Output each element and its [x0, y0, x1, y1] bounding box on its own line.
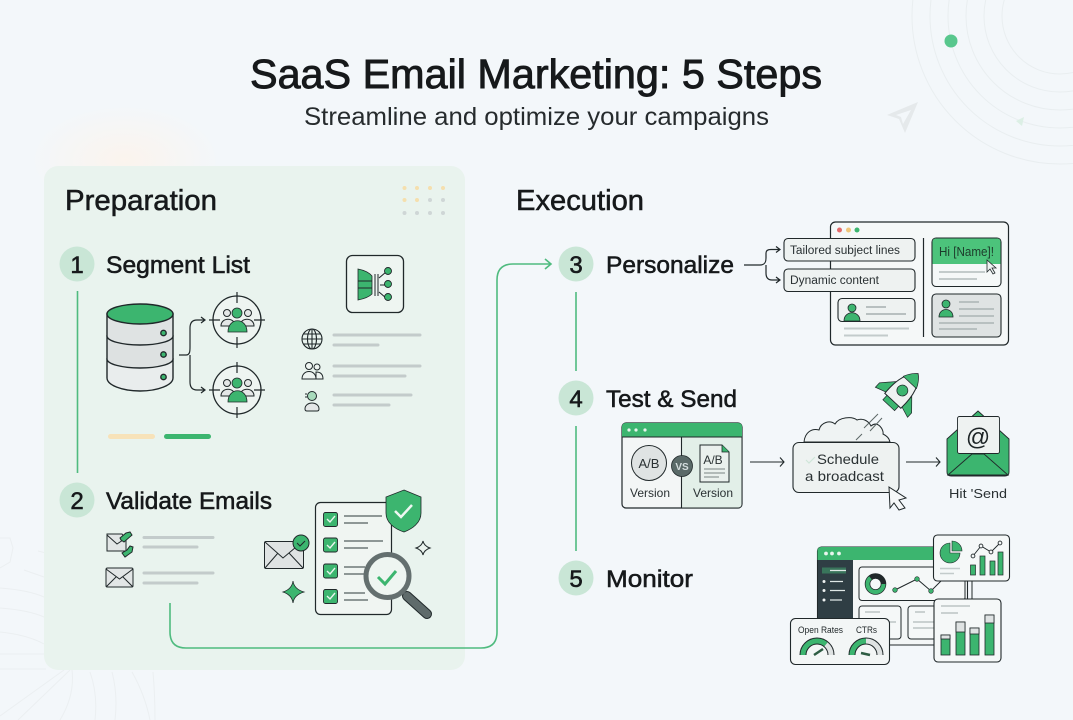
arrow: personalize branches — [744, 246, 780, 283]
schedule box: a broadcast — [805, 468, 884, 484]
card: profile right — [932, 294, 1001, 337]
icon: rocket — [873, 359, 934, 420]
step 4 heading — [558, 380, 737, 416]
step 2 heading — [60, 482, 272, 518]
icon: person with gear — [305, 392, 319, 411]
gauge card — [790, 618, 890, 664]
timeline connector: step 4 to 5 — [575, 426, 577, 551]
decoration: paper plane — [887, 102, 918, 133]
pill: tailored subject lines: Tailored subject lines — [790, 245, 900, 257]
arrow: test to schedule — [750, 458, 784, 466]
decoration: green dot — [944, 34, 958, 48]
arrow: database to segments — [179, 317, 205, 393]
A/B test window — [622, 423, 742, 508]
card: profile left — [838, 298, 915, 322]
step 3 heading: 3 — [569, 252, 583, 279]
A/B test window: Version — [693, 486, 733, 500]
step 2 heading: Validate Emails — [106, 488, 272, 515]
step 3 heading: Personalize — [606, 252, 734, 279]
step 1 heading: Segment List — [106, 252, 250, 279]
step 1 heading — [60, 246, 250, 282]
arrow: preparation to execution — [170, 259, 551, 648]
pill: dynamic content — [784, 269, 915, 292]
icon: cursor — [889, 487, 906, 510]
icon: rocket trail — [856, 414, 882, 440]
placeholder text lines: segments — [334, 335, 420, 405]
decoration: dot grid — [402, 186, 445, 215]
icon: database — [107, 304, 173, 391]
A/B test window: A/B — [639, 456, 659, 471]
icon: email send envelope: @ — [966, 424, 990, 451]
icon: sparkle green — [283, 581, 304, 603]
label: hit send: Hit 'Send — [949, 486, 1007, 501]
icon: email send envelope — [947, 411, 1009, 476]
placeholder text lines: emails — [144, 538, 213, 583]
step 4 heading: 4 — [569, 386, 583, 413]
step 5 heading: 5 — [569, 566, 583, 593]
pill: dynamic content: Dynamic content — [790, 275, 880, 287]
icon: audience — [302, 362, 323, 379]
icon: checklist — [316, 502, 392, 614]
step 3 heading — [558, 246, 734, 282]
chart card: stacked bars — [934, 599, 1001, 662]
gauge: ctrs — [852, 641, 880, 655]
gauge card: Open Rates — [798, 625, 843, 635]
timeline connector: step 1 to 2 — [76, 291, 78, 473]
decoration: small triangle — [1016, 117, 1024, 126]
subtitle: Streamline and optimize your campaigns — [304, 103, 769, 131]
icon: magnifier — [366, 554, 427, 614]
icon: shield — [386, 490, 421, 532]
card: hi name: Hi [Name]! — [939, 244, 994, 259]
heading: execution: Execution — [516, 185, 644, 217]
personalization window — [784, 222, 1008, 345]
icon: sparkle outline — [416, 541, 430, 555]
icon: target segment bottom — [209, 362, 265, 418]
progress bars — [108, 434, 211, 439]
pill: tailored subject lines — [784, 238, 915, 261]
icon: validated email — [107, 532, 133, 557]
chart card: pie and bars — [934, 535, 1010, 581]
heading: preparation: Preparation — [65, 185, 217, 217]
A/B test window: Version — [630, 486, 670, 500]
card: hi name — [932, 238, 1001, 286]
icon: launch cloud — [804, 418, 890, 442]
schedule box — [793, 442, 899, 492]
icon: envelope with badge — [264, 535, 309, 568]
A/B test window: A/B — [703, 453, 723, 467]
icon: segmentation funnel — [346, 256, 404, 312]
icon: target segment top — [209, 292, 265, 348]
icon: globe — [302, 329, 322, 349]
arrow: schedule to send — [906, 458, 940, 466]
title: SaaS Email Marketing: 5 Steps — [250, 51, 822, 97]
step 2 heading: 2 — [70, 488, 84, 515]
step 5 heading: Monitor — [606, 566, 693, 593]
timeline connector: step 3 to 4 — [575, 292, 577, 371]
A/B test window: VS — [675, 462, 689, 473]
step 1 heading: 1 — [70, 252, 84, 279]
schedule box: Schedule — [817, 451, 879, 467]
dashboard window — [818, 547, 972, 645]
gauge: open rates — [803, 641, 831, 655]
icon: plain email — [106, 568, 133, 587]
gauge card: CTRs — [856, 625, 877, 635]
step 5 heading — [558, 560, 693, 596]
panel: preparation — [44, 166, 465, 670]
step 4 heading: Test & Send — [606, 386, 737, 413]
